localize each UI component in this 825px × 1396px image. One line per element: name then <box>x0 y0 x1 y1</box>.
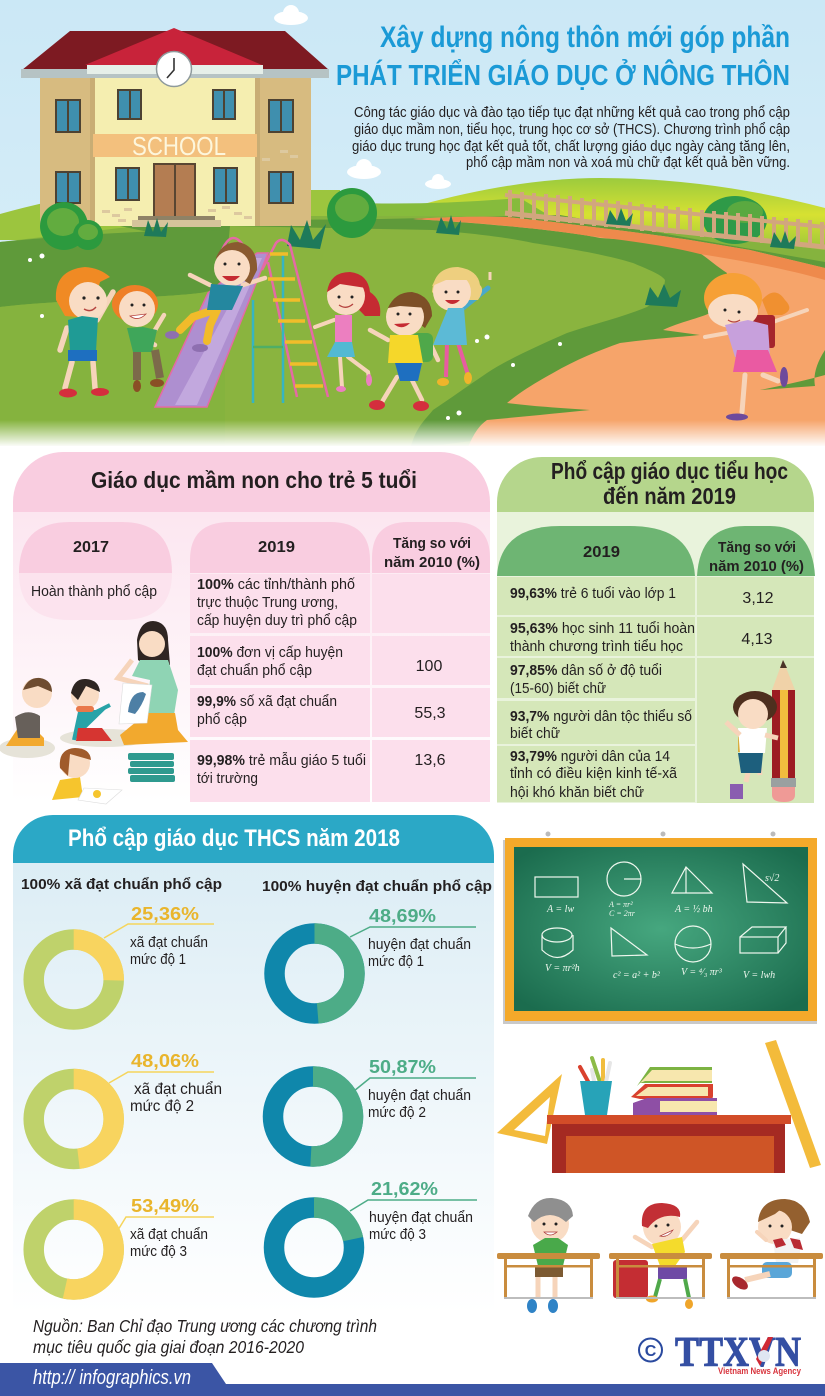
desks <box>497 1253 823 1299</box>
hero illustration: sky and landscape <box>0 0 825 452</box>
donut chart: district level 1 <box>274 906 476 1014</box>
donut chart: commune level 1: xã đạt chuẩn <box>130 935 208 951</box>
row: 99,98% children: 99,98% trẻ mẫu giáo 5 tuổi <box>197 752 366 769</box>
donut chart: commune level 2: 48,06% <box>131 1051 199 1071</box>
row: 100% provinces: cấp huyện duy trì phổ cập <box>197 613 357 629</box>
child drawing <box>52 748 122 804</box>
pupil in green shirt <box>527 1198 573 1313</box>
row: 99,98% children: 13,6 <box>414 752 446 769</box>
donut chart: commune level 2: mức độ 2 <box>130 1098 194 1115</box>
logo: TTXVN <box>639 1330 801 1376</box>
icon: blackboard <box>503 832 817 1024</box>
row: 99,98% children <box>197 752 446 787</box>
formulas: C = 2πr <box>609 909 636 918</box>
row: first grade <box>510 586 774 607</box>
donut chart: commune level 3: mức độ 3 <box>130 1244 187 1260</box>
column increase header: năm 2010 (%) <box>384 555 480 571</box>
donut chart: commune level 1: mức độ 1 <box>130 952 186 968</box>
donut chart: commune level 1: 25,36% <box>131 904 199 924</box>
column increase header <box>697 526 815 576</box>
pupil in yellow shirt and red cap <box>613 1203 697 1309</box>
column increase header: Tăng so với <box>718 540 796 556</box>
row: completing primary: 95,63% học sinh 11 tuổi hoàn <box>510 621 695 637</box>
row: ethnic minority literacy: 93,7% người dân tộc thiểu số <box>510 709 692 725</box>
school sign: SCHOOL <box>132 131 226 161</box>
donut chart: district level 2: huyện đạt chuẩn <box>368 1088 471 1104</box>
panel: primary education <box>497 457 815 803</box>
row: 100% provinces: 100% các tỉnh/thành phố <box>197 577 355 593</box>
row: 100% districts: 100 <box>416 658 442 675</box>
column 2019 header: 2019 <box>583 544 620 561</box>
kid 1 <box>56 267 113 398</box>
formulas <box>545 873 779 981</box>
illustration: teacher desk <box>497 1040 821 1173</box>
formulas: A = lw <box>546 904 574 915</box>
formulas: V = ⁴⁄₃ πr³ <box>681 967 723 978</box>
girl with school bag <box>704 273 807 420</box>
donut chart: district level 3: huyện đạt chuẩn <box>369 1210 473 1226</box>
table rows <box>497 577 814 803</box>
row: 14 provinces literacy: hội khó khăn biết chữ <box>510 785 644 801</box>
column 2019 header <box>190 522 370 573</box>
footer band <box>0 1363 825 1396</box>
row: 100% provinces <box>197 577 357 629</box>
row: 99,9% communes: phổ cập <box>197 712 247 728</box>
donut chart: district level 2: mức độ 2 <box>368 1105 426 1121</box>
icon: school building <box>21 28 329 227</box>
donut chart: district level 1: mức độ 1 <box>368 954 424 970</box>
icon: pencil cup <box>580 1058 612 1115</box>
slide <box>155 238 328 407</box>
donut chart: district level 1: 48,69% <box>369 906 436 926</box>
child in teal shirt <box>71 679 112 741</box>
column 2017: 2017 <box>73 539 109 556</box>
row: completing primary: 4,13 <box>741 631 773 648</box>
clouds <box>274 5 451 189</box>
flowers <box>28 254 562 420</box>
heading: Phổ cập giáo dục THCS năm 2018 <box>68 825 400 852</box>
row: 99,9% communes <box>197 694 446 728</box>
heading <box>551 458 788 509</box>
sub-heading: communes: 100% xã đạt chuẩn phổ cập <box>21 876 222 893</box>
girl with red hair <box>315 272 380 392</box>
row: 99,98% children: tới trường <box>197 771 258 787</box>
row: first grade: 99,63% trẻ 6 tuổi vào lớp 1 <box>510 586 676 602</box>
donut chart: commune level 2: xã đạt chuẩn <box>134 1080 222 1098</box>
source note: mục tiêu quốc gia giai đoạn 2016-2020 <box>33 1337 304 1357</box>
heading: Giáo dục mầm non cho trẻ 5 tuổi <box>91 467 417 493</box>
illustration: pupils at desks <box>497 1198 823 1313</box>
intro text block <box>352 104 790 171</box>
child in grey shirt <box>6 678 52 746</box>
donut chart: district level 3: 21,62% <box>371 1179 438 1199</box>
formulas: c² = a² + b² <box>613 970 661 981</box>
formulas: V = lwh <box>743 970 775 981</box>
heading: đến năm 2019 <box>603 483 736 509</box>
illustration: children at slide <box>56 238 807 420</box>
column increase header <box>372 522 490 573</box>
source note: Nguồn: Ban Chỉ đạo Trung ương các chương trình <box>33 1316 377 1336</box>
blonde girl <box>432 267 490 386</box>
title <box>336 21 790 92</box>
column 2019 header <box>497 526 695 576</box>
row: 99,9% communes: 55,3 <box>414 705 446 722</box>
row: ethnic minority literacy <box>510 709 692 742</box>
kid on slide <box>165 242 265 352</box>
formulas: s√2 <box>765 873 779 884</box>
formulas: V = πr²h <box>545 963 580 974</box>
row: 100% districts: 100% đơn vị cấp huyện <box>197 645 343 661</box>
donut chart: district level 2 <box>273 1057 476 1156</box>
donut chart: district level 1: huyện đạt chuẩn <box>368 937 471 953</box>
sub-heading: districts: 100% huyện đạt chuẩn phổ cập <box>262 878 492 895</box>
formulas: A = ½ bh <box>674 904 713 915</box>
row: 99,9% communes: 99,9% số xã đạt chuẩn <box>197 694 337 710</box>
donut chart: commune level 2 <box>34 1051 222 1159</box>
donut chart: district level 3 <box>274 1179 477 1288</box>
illustration: teacher with children <box>0 621 188 804</box>
row: first grade: 3,12 <box>742 590 774 607</box>
row: 14 provinces literacy <box>510 749 678 801</box>
fence <box>505 190 825 249</box>
donut chart: district level 3: mức độ 3 <box>369 1227 426 1243</box>
icon: stack of books <box>128 753 175 782</box>
row: literacy 15-60: 97,85% dân số ở độ tuổi <box>510 663 662 679</box>
donut chart: commune level 3: 53,49% <box>131 1196 199 1216</box>
teacher <box>118 621 188 745</box>
pupil with ponytail <box>730 1199 810 1292</box>
icon: book stack <box>631 1067 717 1115</box>
row: ethnic minority literacy: biết chữ <box>510 726 560 742</box>
icon: bushes and plants <box>40 188 796 307</box>
kid 2 <box>112 285 164 392</box>
footer band: http:// infographics.vn <box>33 1367 191 1389</box>
row: 100% districts <box>197 645 442 679</box>
formulas: A = πr² <box>608 900 633 909</box>
column 2017: Hoàn thành phổ cập <box>31 584 157 600</box>
row: 14 provinces literacy: tỉnh có điều kiện kinh tế-xã <box>510 766 678 782</box>
row: completing primary: thành chương trình tiểu học <box>510 639 683 655</box>
row: 14 provinces literacy: 93,79% người dân của 14 <box>510 749 670 765</box>
column 2019 header: 2019 <box>258 539 295 556</box>
panel: lower secondary education <box>13 815 494 1313</box>
row: literacy 15-60 <box>510 663 662 697</box>
icon: distant bush <box>703 196 767 244</box>
donut chart: commune level 3 <box>34 1196 214 1290</box>
logo: TTXVN: TTXVN <box>675 1330 801 1376</box>
donut chart: commune level 1 <box>34 904 214 1020</box>
donut chart: district level 2: 50,87% <box>369 1057 436 1077</box>
source note <box>33 1316 377 1357</box>
panel: preschool education <box>13 452 490 802</box>
boy with backpack <box>369 292 438 411</box>
row: 100% districts: đạt chuẩn phổ cập <box>197 663 312 679</box>
logo: TTXVN: Vietnam News Agency <box>718 1366 801 1376</box>
table rows <box>190 574 490 802</box>
donut chart: commune level 3: xã đạt chuẩn <box>130 1227 208 1243</box>
column 2017 <box>19 522 172 620</box>
logo: TTXVN: C <box>645 1343 657 1360</box>
column increase header: năm 2010 (%) <box>709 559 804 575</box>
row: 100% provinces: trực thuộc Trung ương, <box>197 595 338 611</box>
icon: boy with pencil <box>726 660 796 802</box>
row: literacy 15-60: (15-60) biết chữ <box>510 681 606 697</box>
row: completing primary <box>510 621 773 655</box>
column increase header: Tăng so với <box>393 536 471 552</box>
